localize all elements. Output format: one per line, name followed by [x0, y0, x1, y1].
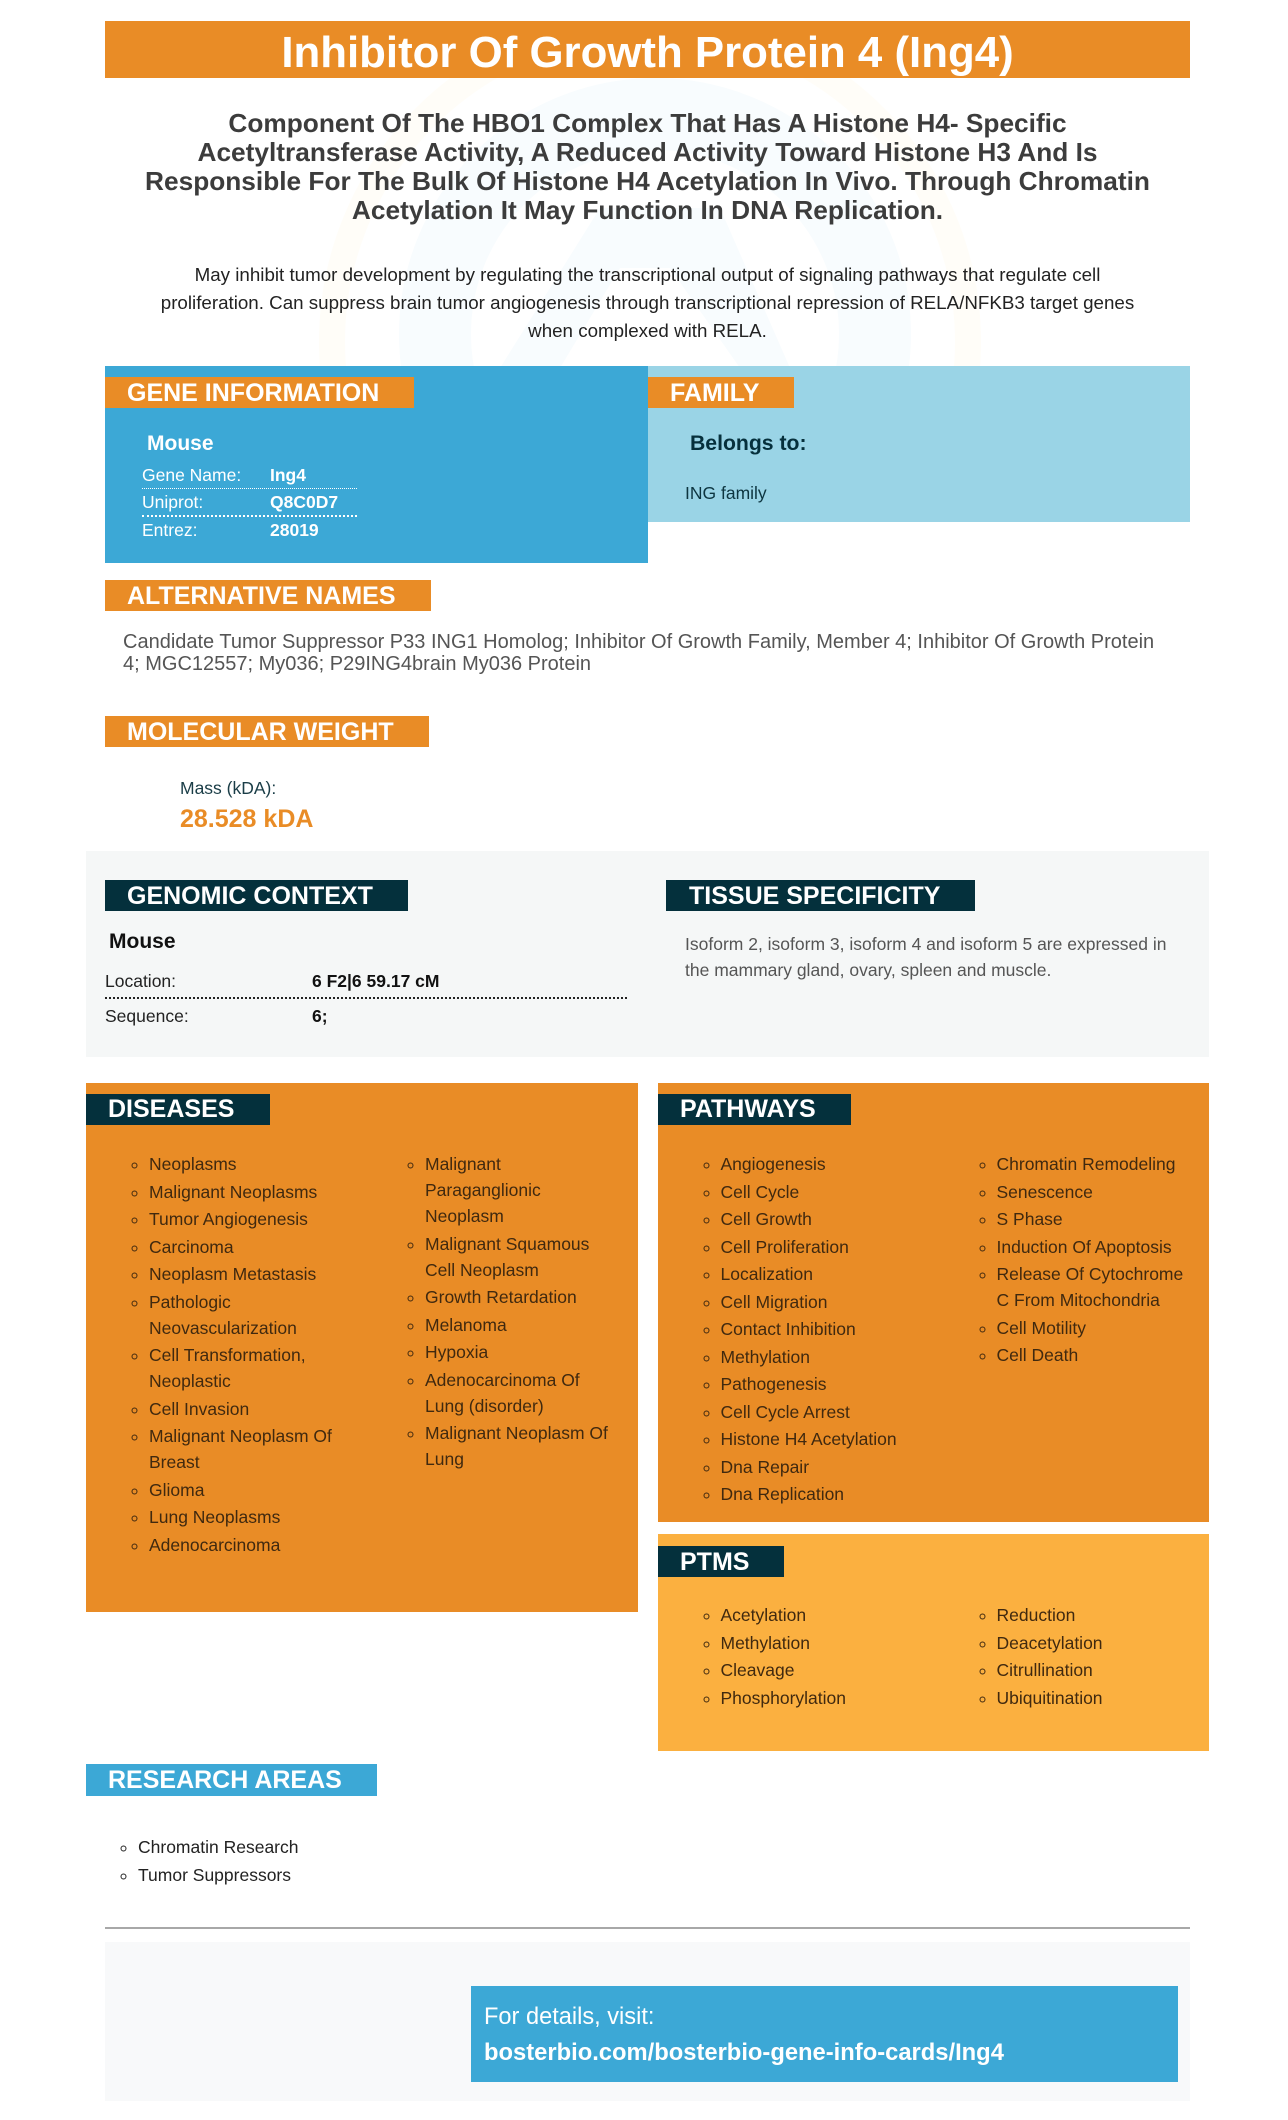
panel: ptms [658, 1534, 1209, 1751]
subtitle [145, 108, 1150, 225]
ptms list column 1: Cleavage [720, 1660, 794, 1680]
panel: footer [105, 1942, 1190, 2101]
heading: genomic context: GENOMIC CONTEXT [127, 882, 373, 910]
subtitle: Acetyltransferase Activity, A Reduced Activity Toward Histone H3 And Is [197, 137, 1098, 167]
pathways list column 2: Cell Death [996, 1345, 1078, 1365]
research areas list: Tumor Suppressors [138, 1864, 291, 1884]
pathways list column 2: Chromatin Remodeling [996, 1154, 1175, 1174]
family value: ING family [685, 483, 767, 503]
mass label: Mass (kDA): [180, 778, 276, 798]
diseases list column 2: Malignant Paraganglionic Neoplasm [425, 1154, 541, 1226]
pathways list column 1: Cell Growth [720, 1209, 812, 1229]
description paragraph [161, 264, 1134, 341]
heading: pathways: PATHWAYS [680, 1095, 816, 1123]
description paragraph: when complexed with RELA. [528, 320, 767, 341]
pathways list column 2: Induction Of Apoptosis [996, 1236, 1172, 1256]
diseases list column 1: Cell Transformation, Neoplastic [149, 1345, 306, 1391]
ptms list column 1: Methylation [720, 1632, 810, 1652]
description paragraph: May inhibit tumor development by regulating the transcriptional output of signaling pathways that regulate cell [195, 264, 1100, 285]
heading: diseases: DISEASES [108, 1095, 234, 1123]
diseases list column 1: Malignant Neoplasm Of Breast [149, 1426, 332, 1472]
heading: research areas: RESEARCH AREAS [108, 1766, 342, 1794]
heading: ptms [658, 1546, 784, 1577]
diseases list column 1: Carcinoma [149, 1236, 234, 1256]
diseases list column 1: Malignant Neoplasms [149, 1182, 317, 1202]
pathways list column 1: Dna Repair [720, 1456, 809, 1476]
belongs to label: Belongs to: [690, 432, 807, 455]
diseases list column 1: Lung Neoplasms [149, 1507, 280, 1527]
gene table: Uniprot: [142, 492, 203, 512]
pathways list column 1: Localization [720, 1264, 813, 1284]
panel: pathways [658, 1083, 1209, 1522]
pathways list column 1 [704, 1154, 897, 1504]
panel: genomic context and tissue specificity [86, 851, 1209, 1057]
ptms list column 2: Deacetylation [996, 1632, 1103, 1652]
gene table [142, 465, 357, 540]
diseases list column 1: Pathologic Neovascularization [149, 1292, 297, 1338]
ptms list column 2: Reduction [996, 1605, 1075, 1625]
sequence row: Sequence: [105, 1006, 189, 1026]
tissue specificity text: the mammary gland, ovary, spleen and muscle. [685, 960, 1051, 980]
pathways list column 1: Histone H4 Acetylation [720, 1429, 897, 1449]
heading: ptms: PTMS [680, 1548, 749, 1576]
pathways list column 1: Cell Proliferation [720, 1236, 849, 1256]
diseases list column 1 [132, 1154, 332, 1554]
pathways list column 1: Contact Inhibition [720, 1319, 856, 1339]
pathways list column 1: Pathogenesis [720, 1374, 827, 1394]
heading: pathways [658, 1094, 851, 1125]
ptms list column 1: Phosphorylation [720, 1688, 846, 1708]
pathways list column 2: Senescence [996, 1182, 1093, 1202]
pathways list column 1: Cell Cycle Arrest [720, 1402, 850, 1422]
gene table: 28019 [270, 520, 319, 540]
panel: genomic context and tissue specificity: 6 F2|6 59.17 cM [312, 971, 439, 991]
ptms list column 1 [704, 1605, 846, 1708]
species label: Mouse [109, 930, 176, 953]
diseases list column 2: Malignant Squamous Cell Neoplasm [425, 1234, 589, 1280]
callout url: bosterbio.com/bosterbio-gene-info-cards/Ing4 [484, 2039, 1004, 2066]
alternative names text [123, 631, 1154, 675]
ptms list column 1: Acetylation [720, 1605, 806, 1625]
diseases list column 2: Growth Retardation [425, 1287, 577, 1307]
species label: Mouse [147, 432, 214, 455]
gene table: Entrez: [142, 520, 197, 540]
ptms list column 2: Citrullination [996, 1660, 1093, 1680]
alternative names text: 4; MGC12557; My036; P29ING4brain My036 Protein [123, 653, 591, 675]
pathways list column 2 [980, 1154, 1183, 1365]
diseases list column 1: Neoplasms [149, 1154, 237, 1174]
heading: diseases [86, 1094, 270, 1125]
heading: alternative names: ALTERNATIVE NAMES [127, 582, 396, 610]
location row: Location: [105, 971, 176, 991]
tissue specificity text: Isoform 2, isoform 3, isoform 4 and isoform 5 are expressed in [685, 934, 1166, 954]
diseases list column 2: Adenocarcinoma Of Lung (disorder) [425, 1370, 580, 1416]
title banner [105, 21, 1190, 78]
panel: diseases [86, 1083, 638, 1612]
heading: family: FAMILY [670, 379, 759, 407]
pathways list column 1: Angiogenesis [720, 1154, 826, 1174]
research areas list: Chromatin Research [138, 1837, 298, 1857]
background watermark logo [300, 78, 1000, 368]
gene table: Ing4 [270, 465, 306, 485]
pathways list column 2: S Phase [996, 1209, 1063, 1229]
diseases list column 1: Tumor Angiogenesis [149, 1209, 308, 1229]
pathways list column 1: Dna Replication [720, 1484, 844, 1504]
callout label: For details, visit: [484, 2004, 654, 2030]
research areas list [120, 1837, 298, 1884]
diseases list column 1: Glioma [149, 1480, 204, 1500]
diseases list column 1: Neoplasm Metastasis [149, 1264, 316, 1284]
panel: family [648, 366, 1190, 522]
pathways list column 1: Cell Cycle [720, 1182, 799, 1202]
panel: gene information [105, 366, 648, 563]
pathways list column 2: Release Of Cytochrome C From Mitochondria [996, 1264, 1183, 1310]
heading: tissue specificity: TISSUE SPECIFICITY [689, 882, 940, 910]
tissue specificity text [685, 934, 1166, 980]
pathways list column 1: Cell Migration [720, 1292, 827, 1312]
diseases list column 2: Hypoxia [425, 1342, 488, 1362]
callout: details link [471, 1986, 1178, 2082]
pathways list column 1: Methylation [720, 1346, 810, 1366]
diseases list column 2: Melanoma [425, 1314, 507, 1334]
heading: gene information: GENE INFORMATION [127, 379, 379, 407]
heading: molecular weight: MOLECULAR WEIGHT [127, 718, 394, 746]
gene table: Gene Name: [142, 465, 241, 485]
panel: genomic context and tissue specificity: 6; [312, 1006, 328, 1026]
diseases list column 1: Cell Invasion [149, 1398, 249, 1418]
title banner: Inhibitor Of Growth Protein 4 (Ing4) [281, 28, 1014, 77]
heading: family [648, 377, 794, 408]
alternative names text: Candidate Tumor Suppressor P33 ING1 Homolog; Inhibitor Of Growth Family, Member 4; Inhibitor Of Growth Protein [123, 631, 1154, 653]
subtitle: Component Of The HBO1 Complex That Has A Histone H4- Specific [228, 108, 1067, 138]
mass value: 28.528 kDA [180, 805, 313, 833]
gene table: Q8C0D7 [270, 492, 338, 512]
pathways list column 2: Cell Motility [996, 1318, 1086, 1338]
ptms list column 2: Ubiquitination [996, 1688, 1103, 1708]
ptms list column 2 [980, 1605, 1103, 1708]
subtitle: Responsible For The Bulk Of Histone H4 Acetylation In Vivo. Through Chromatin [145, 166, 1150, 196]
subtitle: Acetylation It May Function In DNA Replication. [352, 195, 943, 225]
diseases list column 2 [408, 1154, 608, 1469]
description paragraph: proliferation. Can suppress brain tumor angiogenesis through transcriptional repression of RELA/NFKB3 target genes [161, 292, 1134, 313]
diseases list column 2: Malignant Neoplasm Of Lung [425, 1423, 608, 1469]
diseases list column 1: Adenocarcinoma [149, 1534, 280, 1554]
